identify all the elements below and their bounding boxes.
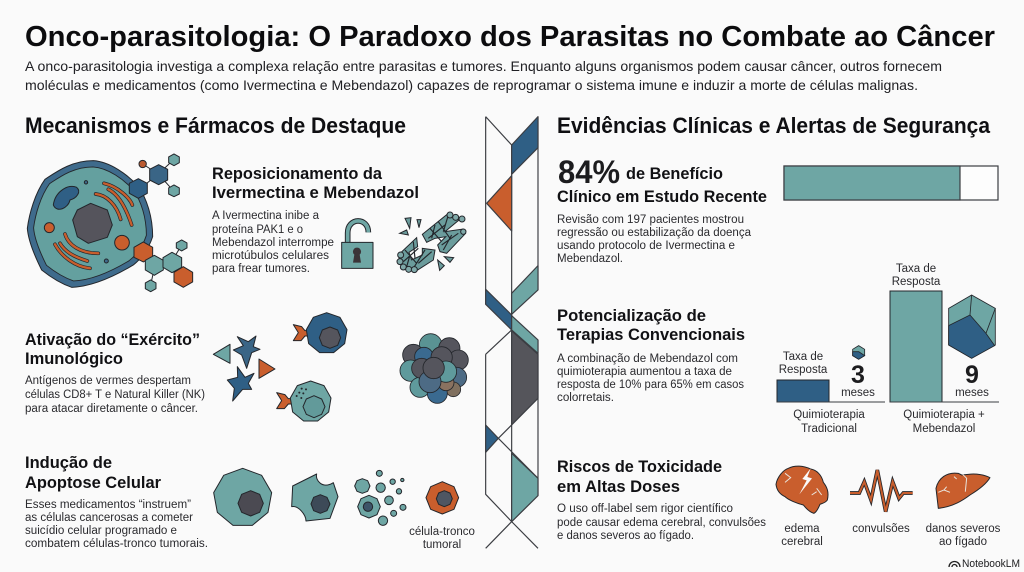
heading: potencialização: Potencialização de [557, 307, 706, 325]
block: potencialização [557, 307, 745, 404]
label: edema cerebral [781, 523, 823, 548]
body: reposicionamento: proteína PAK1 e o [212, 224, 303, 236]
bar: quimioterapia + mebendazol: Resposta [892, 276, 941, 288]
body: potencialização: resposta de 10% para 65% em casos [557, 379, 744, 391]
block: benefício clínico [557, 154, 767, 265]
label: célula-tronco tumoral [409, 526, 475, 551]
icon: cancer cell with molecules [27, 154, 193, 292]
axis label: tradicional: Tradicional [801, 423, 857, 435]
heading: riscos [557, 458, 722, 496]
icon: NK cell attacking [277, 381, 331, 421]
axis label: mebendazol: Mebendazol [913, 423, 975, 435]
stat: 3 meses [841, 361, 875, 399]
title: Onco-parasitologia: O Paradoxo dos Parasitas no Combate ao Câncer [25, 21, 995, 53]
heading: riscos: Riscos de Toxicidade [557, 458, 722, 476]
body: reposicionamento: microtúbulos celulares [212, 250, 329, 262]
label: danos severos: ao fígado [939, 536, 987, 548]
block: ativação [25, 331, 205, 415]
icon: T cell attacking [293, 313, 347, 353]
intro text: A onco-parasitologia investiga a complexa relação entre parasitas e tumores. Enquanto alguns organismos podem causar câncer, outros fornecem [25, 58, 942, 74]
heading: indução: Apoptose Celular [25, 474, 162, 492]
body: ativação [25, 375, 205, 415]
block: reposicionamento [212, 165, 419, 275]
label: edema cerebral: edema [784, 523, 820, 535]
label: convulsões: convulsões [852, 523, 910, 535]
heading: ativação: Ativação do “Exército” [25, 331, 200, 349]
heading: evidências: Evidências Clínicas e Alertas de Segurança [557, 113, 991, 138]
body: ativação: células CD8+ T e Natural Killer (NK) [25, 389, 205, 401]
body: indução: combatem células-tronco tumorais. [25, 538, 208, 550]
heading: indução [25, 454, 162, 492]
body: ativação: Antígenos de vermes despertam [25, 375, 191, 387]
block: riscos [557, 458, 766, 542]
label: edema cerebral: cerebral [781, 536, 823, 548]
axis label: tradicional: Quimioterapia [793, 409, 865, 421]
body: reposicionamento: A Ivermectina inibe a [212, 210, 320, 222]
stat: 9 meses: meses [955, 387, 989, 399]
block: indução [25, 454, 208, 550]
bar: quimioterapia tradicional: Taxa de [783, 351, 823, 363]
body: potencialização: A combinação de Mebendazol com [557, 353, 738, 365]
label: célula-tronco tumoral: tumoral [423, 539, 461, 551]
heading: reposicionamento: Ivermectina e Mebendazol [212, 184, 419, 202]
stat: 84%: 84% [558, 154, 620, 190]
body: ativação: para atacar diretamente o câncer. [25, 403, 198, 415]
heading: mecanismos: Mecanismos e Fármacos de Destaque [25, 113, 406, 138]
body: reposicionamento: Mebendazol interrompe [212, 237, 334, 249]
bar: quimioterapia + mebendazol: Taxa de [896, 263, 936, 275]
bar: quimioterapia tradicional [777, 351, 885, 402]
heading: potencialização: Terapias Convencionais [557, 326, 745, 344]
body: indução: Esses medicamentos “instruem” [25, 499, 191, 511]
body: indução: as células cancerosas a cometer [25, 512, 193, 524]
icon: seizure waveform [850, 470, 913, 512]
central divider: geometric ribbon [486, 117, 538, 548]
label: danos severos: danos severos [926, 523, 1001, 535]
icon: apoptosis stages [214, 468, 406, 525]
stat: 3 meses: meses [841, 387, 875, 399]
body: reposicionamento: para frear tumores. [212, 263, 310, 275]
body: potencialização: quimioterapia aumentou a taxa de [557, 366, 732, 378]
stat: 3 meses: 3 [851, 361, 865, 389]
stat: 9 meses [955, 361, 989, 399]
label: danos severos [926, 523, 1001, 548]
heading: potencialização [557, 307, 745, 344]
heading: reposicionamento: Reposicionamento da [212, 165, 383, 183]
body: benefício [557, 214, 752, 265]
heading: benefício: Clínico em Estudo Recente [557, 188, 767, 206]
body: benefício: Revisão com 197 pacientes mostrou [557, 214, 744, 226]
heading: benefício [557, 165, 767, 206]
body: benefício: regressão ou estabilização da doença [557, 227, 752, 239]
body: potencialização [557, 353, 744, 404]
body: riscos: O uso off-label sem rigor científico [557, 503, 733, 515]
icon: liver [936, 473, 990, 508]
body: potencialização: colorretais. [557, 392, 614, 404]
heading: riscos: em Altas Doses [557, 478, 680, 496]
heading: ativação [25, 331, 200, 368]
watermark: NotebookLM: NotebookLM [962, 558, 1020, 570]
icon: open padlock [342, 221, 373, 268]
icon: tumor stem cell [426, 482, 459, 514]
heading: indução: Indução de [25, 454, 112, 472]
intro text [25, 58, 942, 93]
body: riscos [557, 503, 766, 542]
axis label: tradicional [793, 409, 865, 435]
heading: benefício: de Benefício [626, 165, 723, 183]
icon: broken microtubule [397, 212, 466, 273]
body: indução [25, 499, 208, 550]
intro text: moléculas e medicamentos (como Ivermectina e Mebendazol) capazes de reprogramar o sistema imune e induzir a morte de células malignas. [25, 77, 918, 93]
panel: evidências [557, 113, 1001, 548]
axis label: mebendazol [903, 409, 985, 435]
label: célula-tronco tumoral: célula-tronco [409, 526, 475, 538]
icon: large tumor [949, 295, 995, 358]
body: indução: suicídio celular programado e [25, 525, 177, 537]
icon: small tumor [853, 346, 865, 359]
body: benefício: usando protocolo de Ivermectina e [557, 240, 735, 252]
axis label: mebendazol: Quimioterapia + [903, 409, 985, 421]
panel: mecanismos [25, 113, 475, 551]
heading: ativação: Imunológico [25, 350, 123, 368]
icon: brain [776, 466, 828, 513]
icon: tumor cluster [400, 334, 468, 403]
bar: quimioterapia tradicional: Resposta [779, 364, 828, 376]
progress bar: 84% [784, 166, 998, 200]
heading: reposicionamento [212, 165, 419, 202]
icon: antigens [213, 336, 275, 401]
bar: quimioterapia + mebendazol [890, 263, 999, 402]
chart: response rate comparison [777, 263, 999, 435]
body: reposicionamento [212, 210, 334, 275]
body: riscos: pode causar edema cerebral, convulsões [557, 517, 766, 529]
body: benefício: Mebendazol. [557, 253, 623, 265]
stat: 9 meses: 9 [965, 361, 979, 389]
body: riscos: e danos severos ao fígado. [557, 530, 694, 542]
